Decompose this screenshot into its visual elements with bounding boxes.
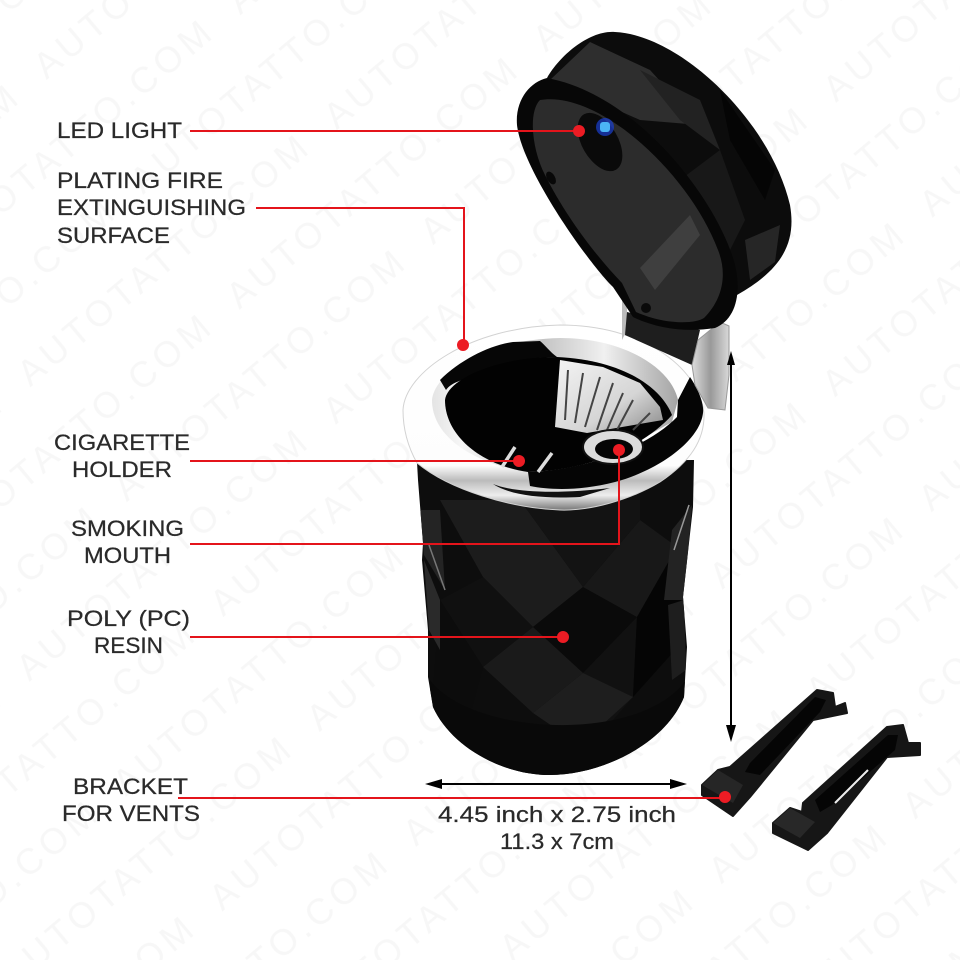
- lid dome back: [547, 32, 791, 295]
- callout: plating fire extinguishing surface: EXTINGUISHING: [57, 195, 246, 220]
- dimensions text: 11.3 x 7cm: [500, 829, 614, 854]
- ashtray body: [417, 460, 694, 780]
- arrow: height dimension: [726, 351, 736, 742]
- callout: poly resin: POLY (PC): [67, 606, 190, 631]
- callout: LED light: [57, 118, 585, 143]
- callout: plating fire extinguishing surface: PLATING FIRE: [57, 168, 223, 193]
- callout: plating fire extinguishing surface: SURFACE: [57, 223, 170, 248]
- LED recess: [568, 105, 632, 179]
- lid: [517, 32, 791, 330]
- dimensions text: [438, 802, 676, 854]
- black lower band: [528, 377, 703, 489]
- ashtray chrome rim: [403, 325, 704, 510]
- dimensions text: 4.45 inch x 2.75 inch: [438, 802, 676, 827]
- textured highlight on plate: [640, 215, 700, 290]
- callout: LED light: LED LIGHT: [57, 118, 182, 143]
- callout: plating fire extinguishing surface: [57, 168, 469, 351]
- LED light: [596, 118, 614, 136]
- callout: smoking mouth: SMOKING: [71, 516, 184, 541]
- hinge: [622, 300, 729, 410]
- inner silver ring: [432, 338, 678, 472]
- black crescent reflection: [440, 341, 557, 390]
- callout: cigarette holder: [54, 430, 525, 482]
- lid rim: [517, 78, 738, 330]
- callout: poly resin: RESIN: [94, 633, 163, 658]
- bracket 1: [702, 690, 847, 816]
- callout: smoking mouth: MOUTH: [84, 543, 171, 568]
- callout: bracket for vents: FOR VENTS: [62, 801, 200, 826]
- cigarette holder pins: [502, 447, 552, 472]
- callout: cigarette holder: CIGARETTE: [54, 430, 190, 455]
- arrow: width dimension: [425, 779, 687, 789]
- fan reflection: [555, 360, 663, 433]
- callout: smoking mouth: [71, 444, 625, 568]
- interior well: [445, 357, 672, 472]
- bracket 2: [773, 725, 920, 850]
- lid inner plate: [533, 99, 723, 322]
- callout: poly resin: [67, 606, 569, 658]
- callout: cigarette holder: HOLDER: [72, 457, 172, 482]
- plate screw holes: [544, 170, 558, 186]
- smoking mouth ring: [583, 430, 643, 464]
- callout: bracket for vents: [62, 774, 731, 826]
- callout: bracket for vents: BRACKET: [73, 774, 188, 799]
